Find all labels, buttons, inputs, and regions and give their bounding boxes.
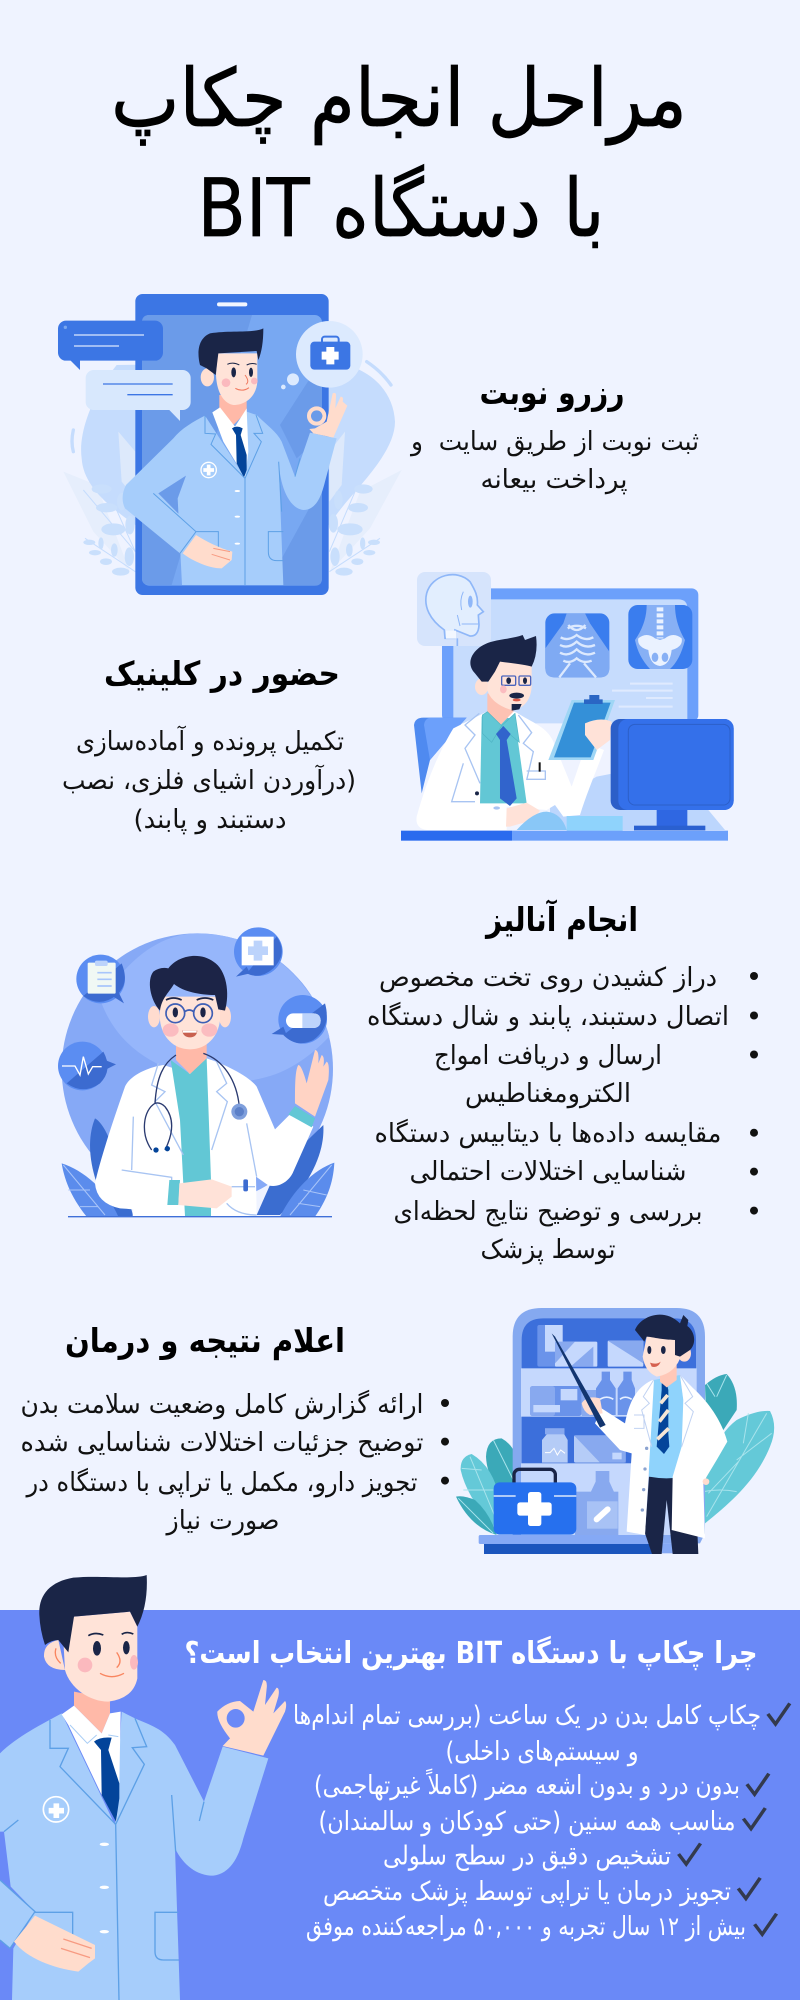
bulleted list: analysis: شناسایی اختلالات احتمالی — [410, 1157, 686, 1187]
bulleted list: results — [20, 1389, 449, 1536]
bulleted list: results: تجویز دارو، مکمل یا تراپی با دستگاه در — [25, 1467, 418, 1498]
why BIT benefit list — [293, 1701, 761, 1942]
body — [95, 1058, 313, 1216]
step 2 text: دستبند و پابند) — [134, 805, 286, 835]
doctor head — [201, 368, 214, 386]
bulleted list: results: توضیح جزئیات اختلالات شناسایی شده — [20, 1428, 424, 1458]
doctor — [416, 712, 604, 830]
step 1 text: ثبت نوبت از طریق سایت و — [409, 427, 699, 457]
panel: why BIT band — [0, 1610, 800, 2000]
step 4 text — [20, 1321, 449, 1536]
step 2 text: (درآوردن اشیای فلزی، نصب — [62, 764, 356, 796]
bulleted list: analysis: دراز کشیدن روی تخت مخصوص — [379, 963, 717, 993]
step 1 text — [409, 373, 699, 495]
why BIT benefit list: بیش از ۱۲ سال تجربه و ۵۰,۰۰۰ مراجعه‌کننده موفق — [306, 1912, 746, 1942]
monitor — [657, 808, 687, 827]
bulleted list: analysis: مقایسه داده‌ها با دیتابیس دستگاه — [375, 1118, 722, 1149]
head — [148, 1006, 160, 1027]
why BIT benefit list: مناسب همه سنین (حتی کودکان و سالمندان) — [318, 1807, 736, 1837]
title — [111, 52, 687, 255]
step 2 text — [62, 654, 356, 835]
bulleted list: analysis: اتصال دستبند، پابند و شال دستگاه — [367, 1001, 729, 1032]
why BIT benefit list: تجویز درمان یا تراپی توسط پزشک متخصص — [323, 1877, 731, 1907]
bulleted list: analysis — [367, 963, 758, 1265]
step 3 text — [367, 899, 758, 1265]
doctor — [645, 1477, 698, 1554]
why BIT heading: چرا چکاپ با دستگاه BIT بهترین انتخاب است؟ — [184, 1635, 758, 1671]
illustration: doctor in phone — [58, 294, 402, 595]
step 2 text: حضور در کلینیک — [104, 654, 340, 694]
illustration: doctor with medicine cabinet — [456, 1308, 774, 1554]
why BIT benefit list: تشخیص دقیق در سطح سلولی — [383, 1842, 671, 1872]
bulleted list: analysis: توسط پزشک — [480, 1235, 616, 1265]
doctor body — [219, 395, 247, 425]
step 1 text: پرداخت بیعانه — [480, 465, 628, 495]
title: با دستگاه BIT — [198, 162, 604, 255]
bulleted list: results: ارائه گزارش کامل وضعیت سلامت بدن — [20, 1389, 424, 1420]
step 2 text: تکمیل پرونده و آماده‌سازی — [76, 725, 344, 757]
icons: check marks — [679, 1703, 790, 1934]
bulleted list: analysis: الکترومغناطیس — [465, 1079, 631, 1109]
step 1 text: رزرو نوبت — [480, 373, 624, 413]
step 4 text: اعلام نتیجه و درمان — [65, 1321, 345, 1361]
bulleted list: analysis: ارسال و دریافت امواج — [434, 1041, 662, 1071]
why BIT benefit list: و سیستم‌های داخلی) — [446, 1737, 638, 1767]
illustration: doctor with stethoscope — [58, 927, 334, 1217]
bulleted list: results: صورت نیاز — [165, 1506, 280, 1536]
bulleted list: analysis: بررسی و توضیح نتایج لحظه‌ای — [394, 1197, 702, 1227]
illustration: doctor with x-rays — [401, 572, 734, 841]
illustration: large doctor giving OK — [0, 1575, 286, 2000]
step 3 text: انجام آنالیز — [484, 899, 638, 940]
title: مراحل انجام چکاپ — [111, 52, 687, 146]
